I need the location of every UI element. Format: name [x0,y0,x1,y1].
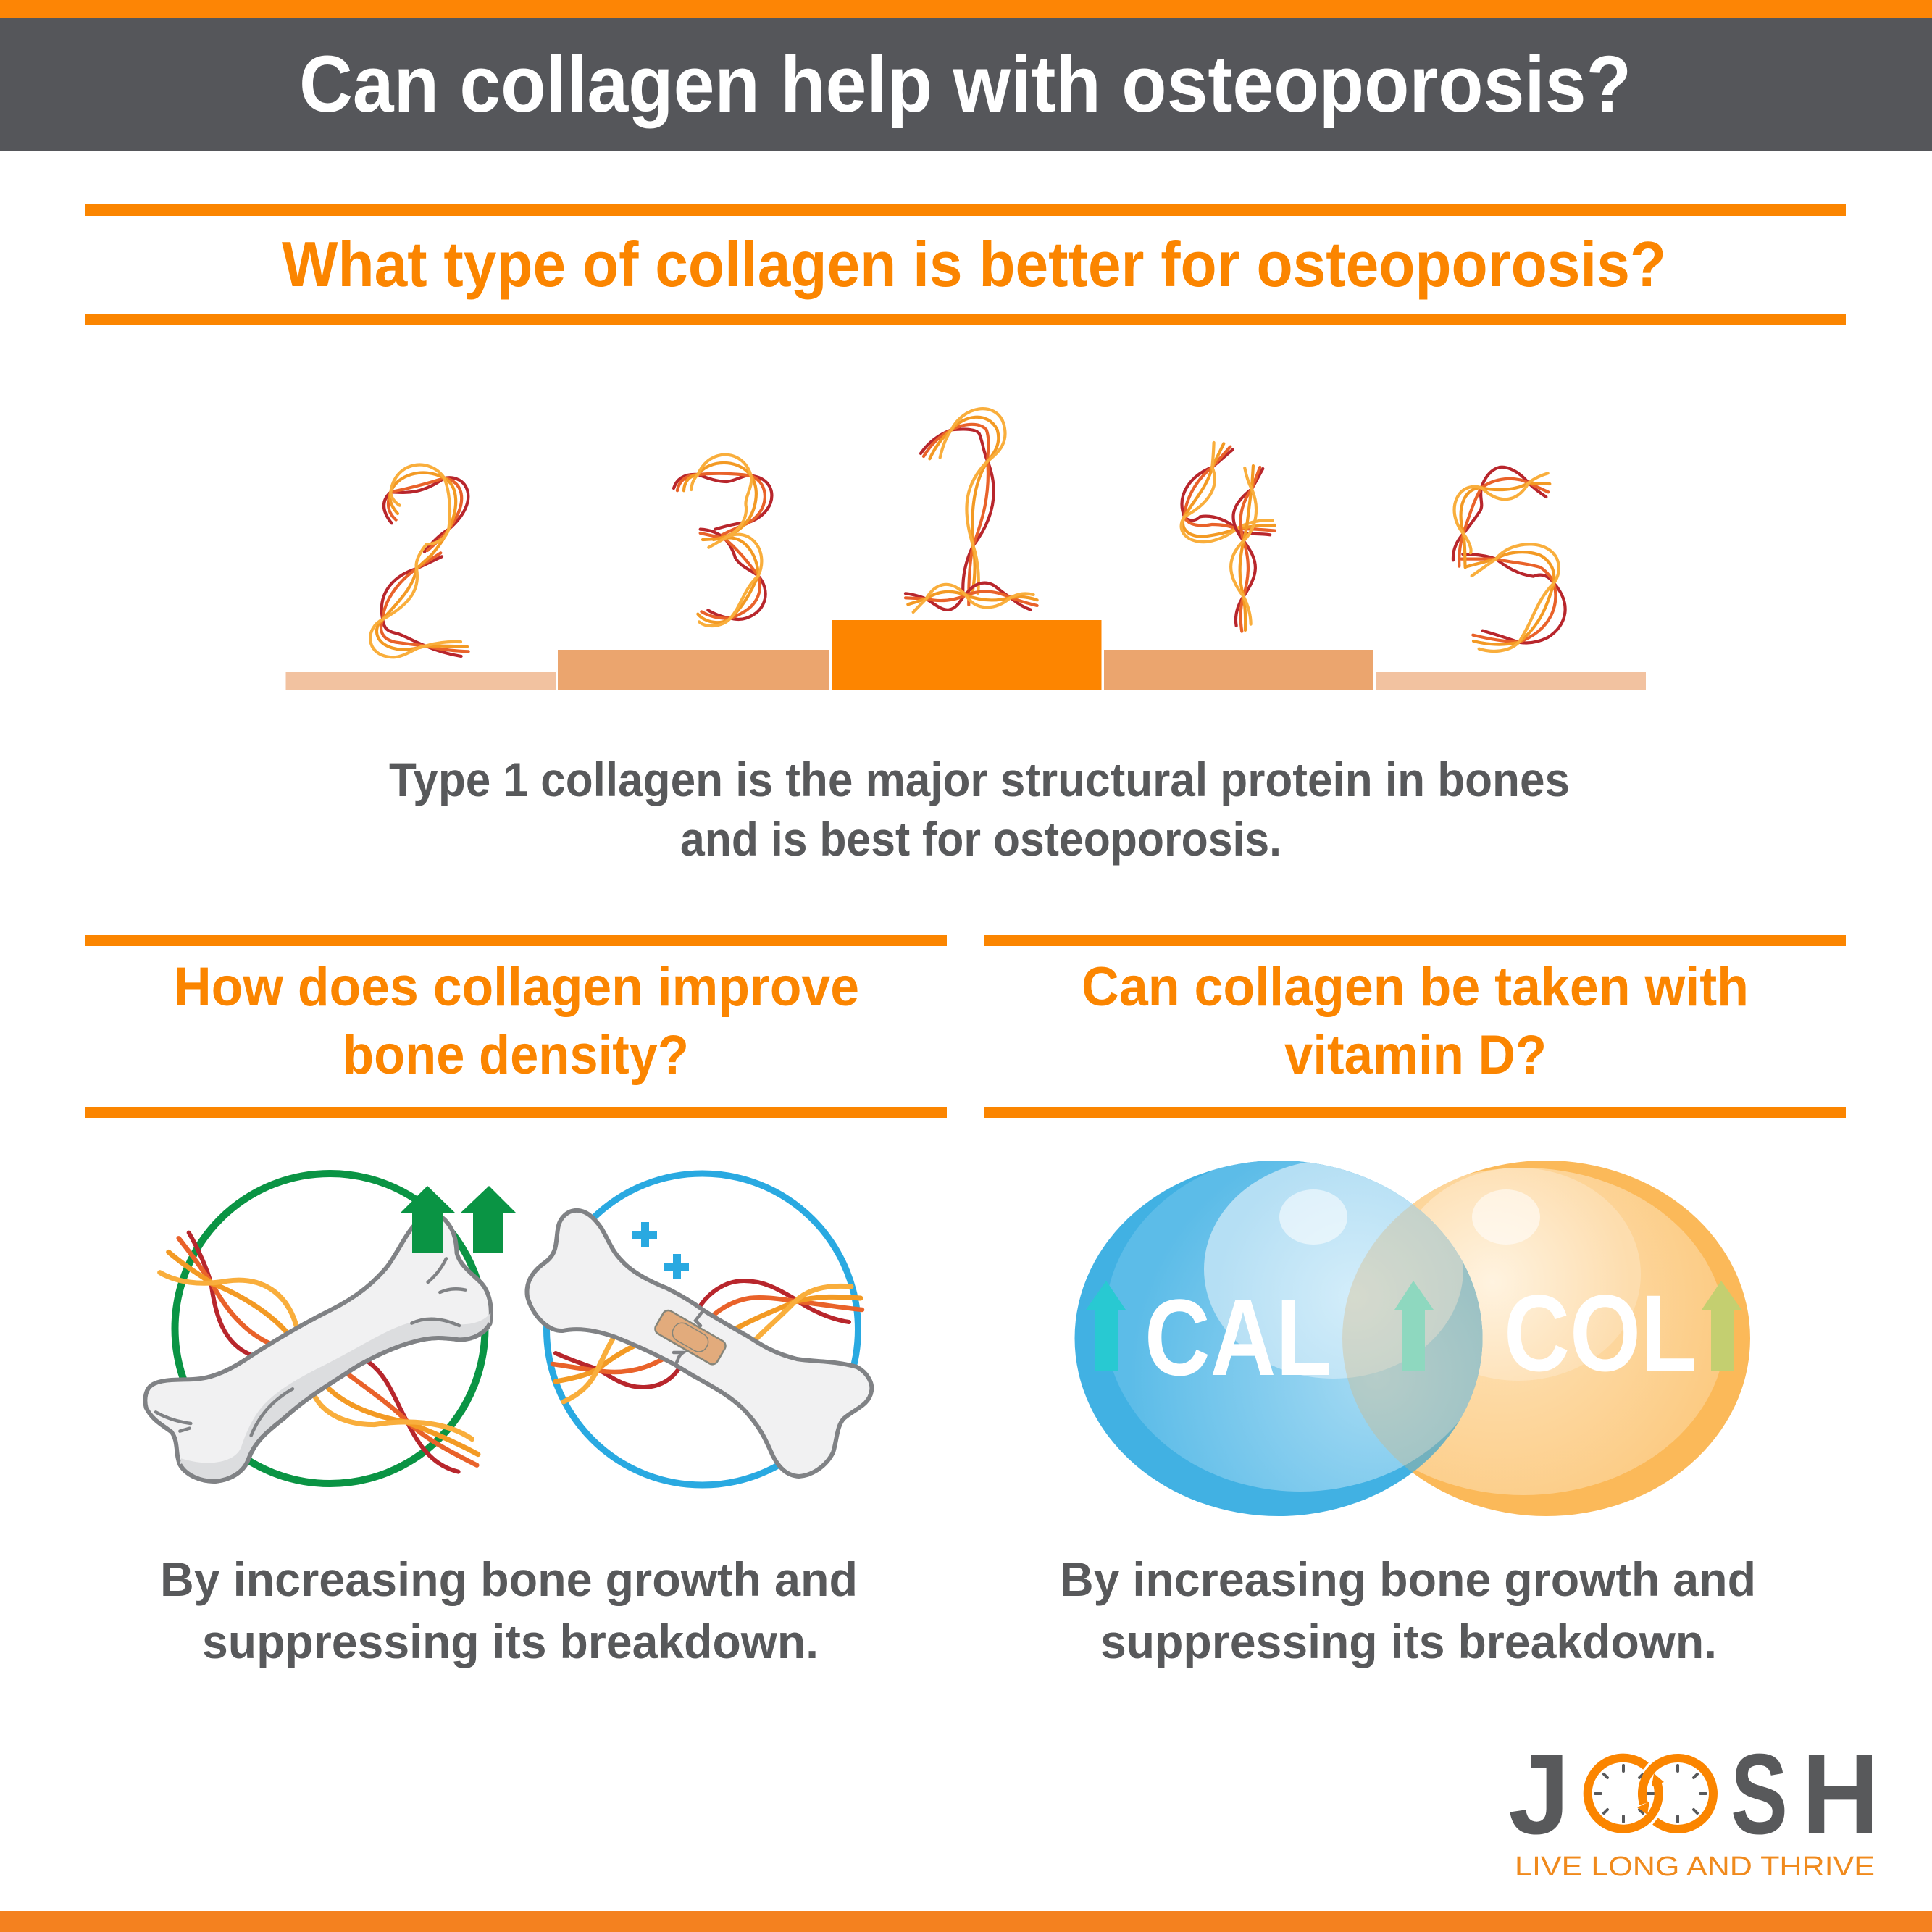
section heading: bone density: How does collagen improve [174,956,859,1018]
COL label: COL [1504,1272,1697,1394]
illustration: calcium and collagen capsules [1075,1153,1750,1516]
podium step rank 3 [558,650,829,690]
podium step rank 1 [832,620,1101,690]
type 1 collagen text: and is best for osteoporosis. [680,812,1281,866]
bone density answer [160,1552,858,1668]
blue circle [546,1174,858,1485]
plus sign 2 [664,1254,689,1279]
bone density answer: By increasing bone growth and [160,1552,858,1606]
section heading: bone density: bone density? [343,1024,689,1086]
podium step rank 5 [1376,672,1646,690]
collagen number 1 [906,409,1037,612]
vitamin D answer: By increasing bone growth and [1060,1552,1756,1606]
teal arrow middle [1394,1281,1434,1371]
section heading: vitamin D: vitamin D? [1284,1024,1547,1086]
type 1 collagen text [389,753,1570,866]
calcium capsule [1075,1153,1496,1516]
logo letter S: S [1731,1731,1788,1858]
JOOSH logo [1508,1731,1879,1882]
fracture lines [674,1311,703,1365]
section heading: vitamin D: Can collagen be taken with [1082,956,1749,1018]
fractured bone [527,1210,871,1476]
section heading: vitamin D [984,935,1846,1118]
section heading: bone density [85,935,947,1118]
bone density answer: suppressing its breakdown. [202,1615,819,1668]
collagen number 5 [1453,467,1565,651]
collagen number 4 [1182,443,1275,632]
podium step rank 2 [285,672,556,690]
green arrow right [460,1186,517,1253]
top accent bar [0,0,1932,18]
bandage [653,1308,727,1366]
tagline: LIVE LONG AND THRIVE [1515,1852,1875,1882]
CAL label: CAL [1145,1276,1331,1398]
vitamin D answer: suppressing its breakdown. [1100,1615,1717,1668]
logo letter H: H [1802,1731,1879,1858]
section heading: type of collagen [85,204,1846,325]
collagen strands behind bone [160,1233,478,1472]
collagen strands behind bone [553,1281,862,1402]
type 1 collagen text: Type 1 collagen is the major structural protein in bones [389,753,1570,806]
teal arrow left [1086,1281,1126,1371]
collagen capsule [1413,1161,1750,1516]
clock ticks [1595,1765,1706,1822]
bone [145,1215,491,1481]
bottom accent bar [0,1911,1932,1932]
illustration: bone growth [145,1174,517,1484]
title banner [0,18,1932,151]
green arrow left [400,1186,456,1253]
illustration: bone repair [527,1174,871,1485]
podium step rank 4 [1104,650,1373,690]
ring arrows [1637,1773,1664,1815]
bone shading [180,1313,490,1481]
logo letter J: J [1508,1731,1570,1858]
green circle [175,1174,485,1484]
title: Can collagen help with osteoporosis? [299,40,1631,129]
vitamin D answer [1060,1552,1756,1668]
plus sign 1 [632,1222,657,1247]
collagen number 3 [674,455,771,626]
section heading: type of collagen: What type of collagen is better for osteoporosis? [282,228,1666,300]
podium chart [285,620,1646,690]
interlocked clock rings [1588,1758,1713,1829]
collagen number 2 [370,465,469,657]
capsule overlap [1342,1204,1482,1472]
green arrow right [1702,1281,1741,1371]
